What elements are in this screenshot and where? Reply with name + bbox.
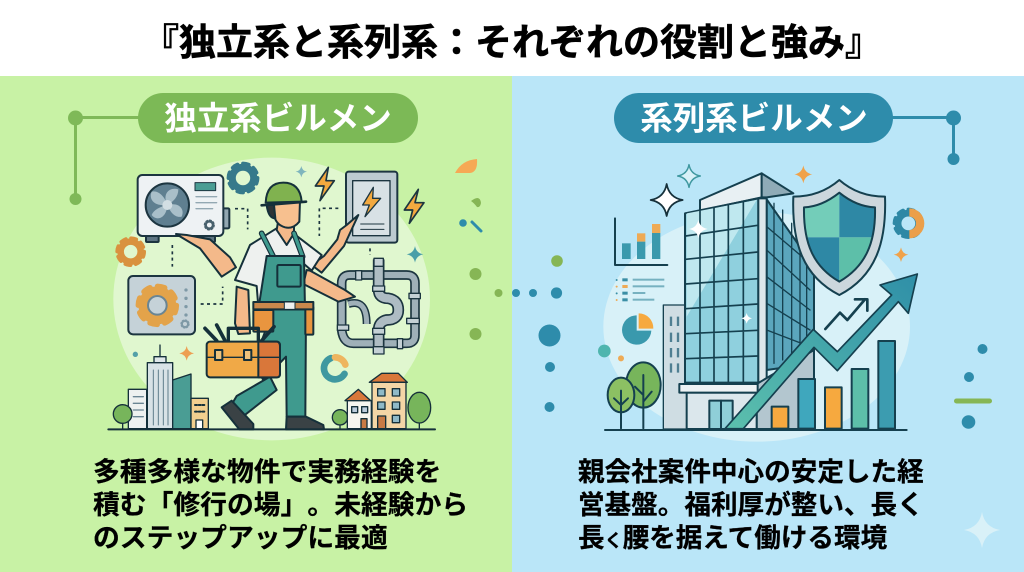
front boot	[286, 417, 324, 429]
title: 『独立系と系列系：それぞれの役割と強み』	[142, 22, 882, 63]
sparkle: bottom right	[964, 512, 1000, 548]
neck and head	[277, 220, 294, 245]
figure: worker	[176, 183, 358, 429]
illustration: building, shield and growth chart	[598, 165, 924, 442]
heading pill: independent	[138, 93, 418, 143]
heading pill: independent: 独立系ビルメン	[164, 100, 392, 136]
panel: affiliated background	[512, 76, 1024, 572]
text block: independent: 。	[307, 490, 334, 520]
icon: teal gear	[229, 164, 257, 192]
title bar	[0, 0, 1024, 76]
ground line	[605, 427, 907, 433]
glow circle	[113, 158, 430, 440]
bar chart: small	[615, 218, 667, 265]
icon: colour gear	[895, 208, 924, 238]
decorative dots	[598, 345, 624, 361]
glow circle	[603, 212, 910, 442]
icon: gear machine box	[128, 276, 195, 334]
icon: sparkles and dots	[133, 166, 423, 361]
icon: air conditioner	[138, 175, 229, 242]
sparkles	[651, 165, 908, 324]
icon: toolbox	[205, 325, 280, 377]
back leg and boot	[230, 377, 277, 417]
overalls	[262, 233, 303, 257]
connector: left heading	[68, 110, 141, 205]
legend list	[616, 278, 664, 301]
belt and pouches	[253, 310, 273, 332]
bar chart: rising bars	[772, 341, 895, 429]
text block: independent: 多種多様な物件で実務経験を	[93, 457, 441, 487]
trees	[608, 362, 661, 428]
illustration: worker and equipment	[108, 158, 435, 440]
icon: electric panel	[346, 172, 397, 243]
connector: right heading	[890, 110, 961, 165]
panel: independent background	[0, 76, 512, 572]
growth arrow	[725, 274, 917, 429]
pie chart	[622, 313, 653, 345]
small arrow	[825, 299, 867, 329]
dotted connectors	[172, 208, 370, 304]
icon: donut chart	[320, 353, 350, 383]
pipe couplings	[337, 258, 420, 354]
decorative dots: right edge	[954, 344, 992, 429]
low side building	[663, 305, 687, 429]
heading pill: affiliated	[614, 93, 893, 143]
icon: orange gear	[117, 238, 144, 265]
shirt	[235, 228, 322, 307]
text block: independent: 未経験から	[334, 490, 468, 520]
decorative dots and shapes along divider	[455, 159, 563, 412]
text block: independent: 積む「修行の場」	[93, 490, 307, 520]
arms	[176, 234, 236, 277]
text block: affiliated: 親会社案件中心の安定した経	[578, 457, 924, 487]
main tower	[679, 173, 814, 429]
icon: lightning bolts	[315, 167, 424, 223]
city and houses	[108, 345, 435, 429]
text block: independent: のステップアップに最適	[93, 523, 388, 553]
heading pill: affiliated: 系列系ビルメン	[640, 100, 868, 136]
icon: shield	[793, 180, 885, 295]
text block: affiliated: 長く腰を据えて働ける環境	[578, 523, 887, 553]
text block: affiliated: 営基盤。福利厚が整い、長く	[578, 490, 924, 520]
hat	[266, 183, 302, 203]
icon: pipes	[337, 258, 420, 354]
